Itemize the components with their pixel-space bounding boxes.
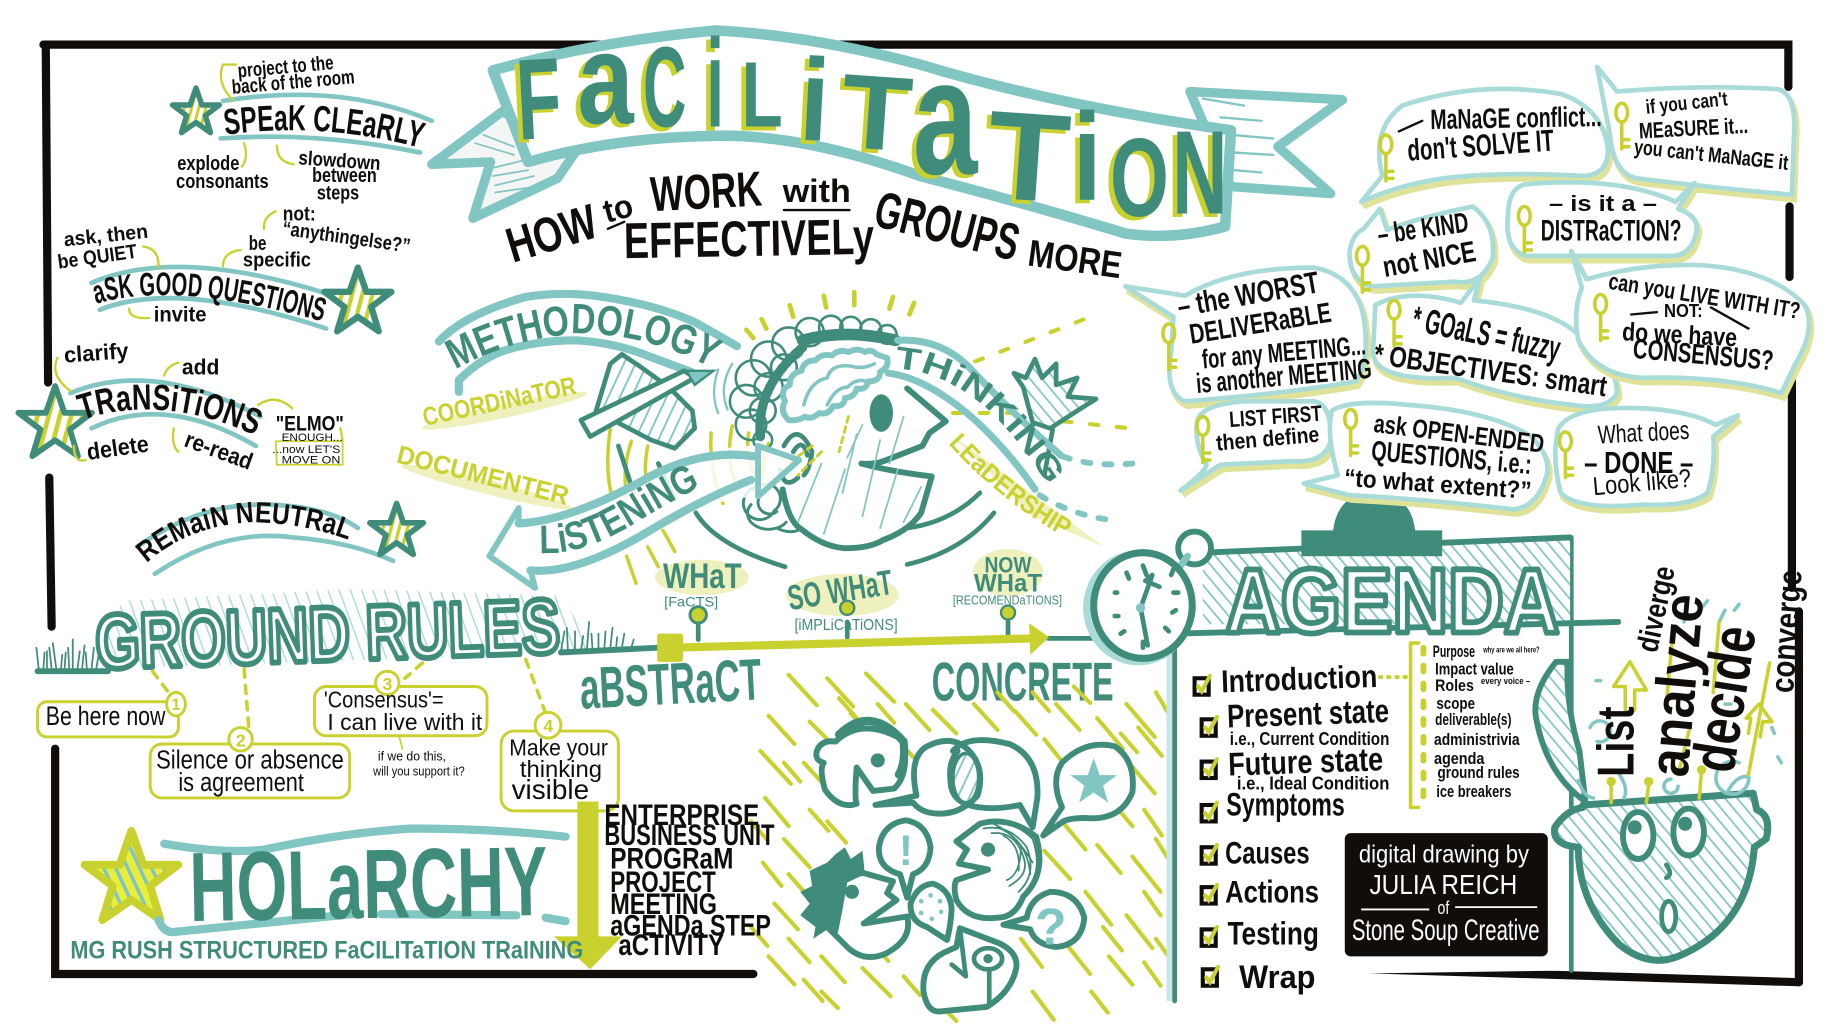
left ribbon tail	[432, 111, 575, 218]
banner body	[493, 31, 1231, 236]
speech bubble: live with it: NOT:	[1664, 300, 1703, 321]
timeline: abstract to concrete	[578, 549, 1097, 722]
notes: steps	[317, 182, 359, 204]
heading: HOLaRCHY	[189, 826, 548, 942]
introduction details list: administrivia	[1434, 731, 1520, 749]
credit box: JULIA REICH	[1369, 869, 1517, 900]
listening arrow banner	[486, 443, 802, 591]
question bubble: ?	[1035, 898, 1067, 956]
speech bubble: list first: then define	[1215, 422, 1320, 456]
star	[324, 268, 391, 331]
speech bubble: manage conflict: MaNaGE conflict...	[1430, 101, 1602, 135]
rule callout 1	[38, 692, 185, 737]
concrete label: CONCRETE	[932, 651, 1114, 713]
heading: REMaiN NEUTRaL	[135, 502, 349, 562]
diagonal rain hatching	[751, 674, 1170, 1021]
title letters	[513, 7, 1227, 240]
agenda items: i.e., Current Condition	[1230, 728, 1389, 749]
star	[370, 503, 423, 554]
subtitle	[500, 161, 1124, 286]
speech bubble: goals and objectives	[1372, 278, 1619, 411]
introduction details list: ice breakers	[1436, 783, 1511, 801]
transitions group	[16, 338, 344, 475]
agenda items: Actions	[1225, 873, 1319, 909]
question bubble	[1003, 892, 1084, 956]
ribbon lines	[70, 380, 261, 446]
speech bubble: open-ended questions	[1304, 403, 1550, 514]
agenda items: Introduction	[1221, 658, 1378, 699]
notes: project to the	[237, 52, 335, 82]
speech bubble: open-ended questions: QUESTIONS, i.e.:	[1370, 435, 1533, 480]
notes: between	[312, 165, 377, 187]
so what pin: [iMPLiCaTiONS]	[794, 617, 898, 634]
ask good questions group	[56, 204, 412, 334]
coordinator and documenter labels: COORDiNaTOR	[420, 372, 579, 432]
subtitle: MORE	[1026, 232, 1124, 286]
swirls and pins	[1578, 601, 1781, 798]
agenda items: Wrap	[1239, 958, 1315, 995]
person bottom	[923, 928, 1016, 1012]
notes: be	[249, 233, 266, 255]
agenda items: i.e., Ideal Condition	[1237, 773, 1389, 794]
credit box	[1345, 833, 1548, 956]
speech bubble: measure it: MEaSURE it...	[1638, 113, 1749, 143]
speech bubble: live with it	[1571, 251, 1811, 398]
lid	[1535, 662, 1585, 801]
rotated words	[1586, 563, 1809, 779]
rule callout 4: visible	[512, 774, 589, 805]
rule callout 3: if we do this,	[378, 748, 446, 763]
agenda items: Present state	[1226, 692, 1390, 735]
eye	[870, 394, 893, 432]
rotated words: List	[1586, 706, 1644, 777]
notes: slowdown	[298, 147, 381, 175]
introduction details list: why are we all here?	[1483, 645, 1540, 654]
notes: consonants	[176, 171, 269, 193]
rule callout 4: 4	[543, 716, 553, 736]
rule callout 2: Silence or absence	[156, 747, 344, 775]
holarchy levels list	[604, 799, 775, 962]
face hatching	[798, 417, 921, 534]
introduction details list: agenda	[1434, 750, 1485, 768]
neck and shoulder lines	[618, 446, 994, 567]
speech bubble: list first	[1181, 401, 1333, 495]
now what pin: NOW	[985, 553, 1032, 578]
holarchy levels list: PROGRaM	[610, 842, 733, 875]
notes: back of the room	[231, 66, 356, 99]
title letters: i	[797, 34, 833, 166]
hatching behind heading	[106, 589, 593, 669]
heading: SPEaK CLEaRLY	[224, 105, 426, 146]
holarchy levels list: ENTERPRISE	[604, 799, 759, 832]
notes: be QUIET	[56, 241, 138, 274]
credit box: digital drawing by	[1359, 841, 1530, 868]
title banner	[432, 7, 1342, 243]
introduction details list: every voice –	[1481, 676, 1530, 686]
lime arrows	[1614, 662, 1772, 737]
notes: delete	[85, 431, 150, 465]
dashed connectors	[153, 659, 546, 728]
agenda items: Future state	[1228, 740, 1384, 783]
speech bubble: manage conflict	[1361, 89, 1610, 207]
ELMO note	[272, 432, 343, 467]
holarchy arrow	[554, 801, 622, 969]
title letters: i	[706, 13, 724, 154]
speech bubble: be kind: – be KIND	[1375, 207, 1470, 250]
hatching behind heading	[1203, 537, 1570, 624]
speech bubble: live with it: do we have	[1621, 318, 1738, 352]
face outline	[774, 376, 946, 548]
title letters: N	[1172, 108, 1227, 240]
methodology banner: METHODOLOGY	[444, 304, 724, 368]
what pin	[655, 557, 749, 623]
rule callout 2	[150, 728, 350, 798]
holarchy levels list: PROJECT	[610, 866, 716, 899]
speech bubble: be kind: not NICE	[1380, 235, 1478, 284]
coordinator and documenter labels: DOCUMENTER	[394, 441, 572, 511]
title letters: a	[577, 7, 635, 151]
notes: explode	[177, 153, 239, 175]
thinking banner	[884, 336, 1136, 522]
head bowl	[1554, 793, 1768, 960]
speech bubble: worst deliverable: for any MEETING...	[1201, 330, 1367, 374]
speech bubble: manage conflict: don't SOLVE IT	[1406, 124, 1555, 168]
dots bubble	[911, 884, 952, 940]
agenda items: Symptoms	[1226, 786, 1345, 823]
listening arrow banner: LiSTENiNG	[541, 466, 697, 554]
rule callout 3: I can live with it	[327, 709, 483, 735]
pencil	[581, 371, 695, 437]
notes: clarify	[63, 338, 130, 368]
heading: AGENDA	[1225, 550, 1560, 652]
timeline arrow	[657, 623, 1049, 662]
speech bubble: goals and objectives: * GOaLS = fuzzy	[1409, 299, 1564, 369]
speech bubble: worst deliverable: is another MEETING	[1195, 353, 1373, 399]
title letters: i	[1073, 87, 1102, 226]
abstract label: aBSTRaCT	[578, 647, 763, 722]
speech bubble: open-ended questions: ask OPEN-ENDED	[1372, 410, 1546, 459]
subtitle: HOW	[500, 194, 604, 273]
thinking head: list, analyze, decide	[1535, 563, 1809, 960]
leadership label: LEaDERSHIP	[949, 432, 1072, 532]
rule callout 2: is agreement	[178, 769, 304, 797]
hand holding pencil	[581, 354, 732, 448]
speech bubble: measure it: you can't MaNaGE it	[1633, 136, 1789, 175]
speech bubble: distraction: – is it a –	[1549, 191, 1657, 216]
rule callout 1: 1	[171, 696, 180, 714]
credit box: Stone Soup Creative	[1352, 914, 1540, 947]
subtitle: to	[599, 186, 637, 230]
ELMO note: MOVE ON	[282, 455, 340, 467]
speech bubble: list first: LIST FIRST	[1228, 401, 1323, 432]
so what pin: SO WHaT	[785, 563, 896, 618]
speech bubble: worst deliverable: DELIVERaBLE	[1187, 297, 1333, 350]
title letters: C	[643, 25, 686, 152]
remain neutral group	[134, 500, 426, 576]
rule callout 1: Be here now	[46, 701, 166, 731]
checkboxes	[1195, 676, 1218, 986]
what pin: [FaCTS]	[664, 594, 718, 610]
ribbon lines	[92, 267, 326, 329]
heading: TRaNSiTiONS	[75, 384, 262, 434]
notes: specific	[243, 249, 311, 271]
person with spiky hair	[800, 847, 908, 957]
title letters: T	[837, 52, 916, 175]
board	[1175, 634, 1571, 1001]
speech bubble: distraction: DISTRaCTION?	[1541, 215, 1682, 248]
introduction details list	[1380, 643, 1540, 807]
brain	[783, 350, 888, 420]
speak clearly group	[170, 52, 434, 204]
stopwatch	[1087, 532, 1211, 662]
person top-left	[816, 721, 905, 805]
holarchy levels list: aCTIVITY	[618, 929, 724, 962]
holarchy levels list: BUSINESS UNIT	[604, 819, 775, 852]
introduction details list: ground rules	[1437, 764, 1520, 782]
ELMO note: ENOUGH...	[282, 432, 343, 444]
exclamation bubble	[879, 820, 931, 898]
introduction details list: Impact value	[1435, 661, 1514, 679]
speech bubble: measure it	[1597, 67, 1797, 199]
rotated words: converge	[1763, 569, 1809, 694]
clip	[1301, 493, 1442, 556]
subtitle: with	[782, 172, 851, 209]
speech bubble: be kind	[1349, 207, 1495, 292]
introduction details list: Purpose	[1433, 643, 1475, 661]
thinking banner: THiNKiNG	[897, 346, 1062, 482]
rule callout 3: 'Consensus'=	[324, 687, 444, 713]
notes: re-read	[181, 426, 256, 475]
ribbon bands	[164, 828, 566, 851]
speech bubble: open-ended questions: “to what extent?”	[1343, 465, 1532, 505]
now what pin: [RECOMENDaTIONS]	[953, 592, 1062, 607]
rule callout 4	[501, 712, 618, 811]
holarchy	[70, 826, 583, 965]
agenda items: Causes	[1225, 835, 1310, 871]
speech bubble: distraction	[1507, 182, 1699, 261]
coordinator and documenter labels	[394, 372, 589, 515]
face	[1623, 809, 1704, 932]
rotated words: diverge	[1631, 563, 1682, 655]
title letters: L	[742, 43, 783, 147]
speech bubble: worst deliverable	[1125, 265, 1373, 406]
star	[85, 831, 178, 920]
speech bubble: live with it: CONSENSUS?	[1632, 333, 1775, 376]
notes: add	[182, 354, 219, 379]
what pin: WHaT	[663, 557, 742, 596]
overlapping speech bubbles	[875, 740, 1038, 827]
title letters: F	[513, 34, 565, 165]
subtitle: WORK	[649, 161, 763, 222]
holarchy levels list: MEETING	[610, 888, 717, 921]
notes: invite	[154, 304, 207, 327]
agenda items: Testing	[1227, 915, 1319, 952]
face and head	[618, 316, 994, 567]
subtitle: GROUPS	[869, 180, 1026, 271]
ground rules	[36, 584, 657, 728]
star bubble	[1043, 745, 1133, 836]
ELMO note: ...now LET'S	[272, 444, 340, 456]
exclamation bubble: !	[899, 827, 913, 874]
introduction details list: scope	[1436, 695, 1475, 713]
notes	[63, 338, 344, 475]
rule callout 3: 3	[383, 674, 393, 694]
introduction details list: deliverable(s)	[1435, 711, 1511, 729]
speech bubble: what does done look like: What does	[1597, 417, 1690, 450]
notes: "ELMO"	[276, 413, 344, 436]
rotated words: analyze	[1637, 591, 1715, 779]
rule callout 3	[314, 671, 487, 779]
speech bubble: what does done look like	[1555, 408, 1740, 511]
hair scribble	[730, 316, 897, 532]
rotated words: decide	[1679, 621, 1769, 777]
right ribbon tail	[1190, 92, 1342, 194]
notes	[56, 204, 412, 327]
subtitle: EFFECTIVELy	[623, 208, 874, 269]
rule callout 3: will you support it?	[372, 764, 465, 779]
centre figure: radiating dashes and lime arcs	[608, 292, 1141, 583]
grass	[36, 622, 634, 669]
ear	[780, 434, 812, 482]
notes	[176, 52, 381, 204]
speech bubble: what does done look like: – DONE –	[1584, 446, 1693, 480]
title shadow	[509, 11, 1223, 243]
so what pin	[785, 563, 899, 634]
heading: GROUND RULES	[94, 584, 561, 686]
title letters: T	[983, 83, 1074, 230]
subheading: MG RUSH STRUCTURED FaCILITaTION TRaINING	[70, 938, 583, 965]
ribbon lines	[221, 95, 432, 153]
now what pin: WHaT	[974, 570, 1042, 597]
rule callout 2: 2	[236, 730, 246, 750]
speech bubble: worst deliverable: – the WORST	[1175, 265, 1322, 324]
holarchy levels list: aGENDa STEP	[610, 909, 771, 942]
heading: aSK GOOD QUESTIONS	[94, 272, 326, 320]
title letters: O	[1110, 115, 1169, 240]
introduction details list: Roles	[1435, 677, 1474, 695]
credit box: of	[1437, 897, 1450, 918]
now what pin	[953, 549, 1062, 620]
notes: “anythingelse?”	[281, 218, 412, 258]
title letters: a	[913, 25, 979, 209]
star	[173, 88, 219, 133]
people in conversation	[800, 721, 1133, 1012]
agenda clipboard	[1166, 493, 1618, 1001]
speech bubble: measure it: if you can't	[1645, 88, 1729, 119]
agenda items	[1221, 658, 1390, 995]
raised hand	[1014, 359, 1096, 475]
notes: ask, then	[63, 221, 149, 251]
notes: not:	[283, 204, 316, 226]
rule callout 4: thinking	[520, 756, 602, 782]
rule callout 4: Make your	[509, 735, 608, 761]
speech bubble: goals and objectives: * OBJECTIVES: smart	[1372, 338, 1609, 403]
speech bubble: what does done look like: Look like?	[1592, 465, 1692, 501]
person with hair	[955, 821, 1039, 918]
star	[18, 386, 92, 456]
